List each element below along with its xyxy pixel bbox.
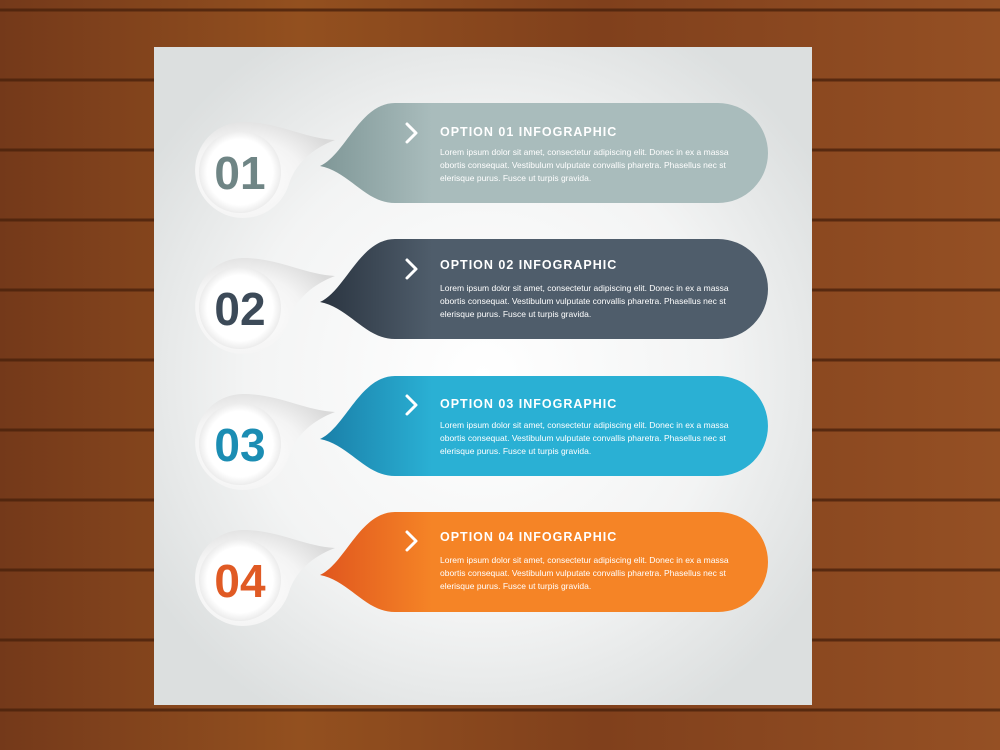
item 2: elerisque purus. Fusce ut turpis gravida. — [440, 309, 591, 319]
item 1: 01 — [214, 147, 266, 199]
item 4: 04 — [214, 555, 266, 607]
item 2: 02 — [214, 283, 266, 335]
item 4: OPTION 04 INFOGRAPHIC — [440, 530, 617, 544]
item 3 — [195, 376, 768, 490]
item 1: elerisque purus. Fusce ut turpis gravida. — [440, 173, 591, 183]
item 1 — [195, 103, 768, 218]
item 3: 03 — [214, 419, 266, 471]
item 4: elerisque purus. Fusce ut turpis gravida. — [440, 581, 591, 591]
paper panel — [154, 47, 812, 705]
item 3: obortis consequat. Vestibulum vulputate convallis pharetra. Phasellus nec st — [440, 433, 726, 443]
item 1: OPTION 01 INFOGRAPHIC — [440, 125, 617, 139]
item 2: obortis consequat. Vestibulum vulputate convallis pharetra. Phasellus nec st — [440, 296, 726, 306]
item 3: elerisque purus. Fusce ut turpis gravida. — [440, 446, 591, 456]
item 3: OPTION 03 INFOGRAPHIC — [440, 397, 617, 411]
item 2: Lorem ipsum dolor sit amet, consectetur adipiscing elit. Donec in ex a massa — [440, 283, 729, 293]
item 3: Lorem ipsum dolor sit amet, consectetur adipiscing elit. Donec in ex a massa — [440, 420, 729, 430]
item 4 — [195, 512, 768, 626]
item 1: Lorem ipsum dolor sit amet, consectetur adipiscing elit. Donec in ex a massa — [440, 147, 729, 157]
item 2: OPTION 02 INFOGRAPHIC — [440, 258, 617, 272]
item 4: Lorem ipsum dolor sit amet, consectetur adipiscing elit. Donec in ex a massa — [440, 555, 729, 565]
item 4: obortis consequat. Vestibulum vulputate convallis pharetra. Phasellus nec st — [440, 568, 726, 578]
item 1: obortis consequat. Vestibulum vulputate convallis pharetra. Phasellus nec st — [440, 160, 726, 170]
item 2 — [195, 239, 768, 354]
